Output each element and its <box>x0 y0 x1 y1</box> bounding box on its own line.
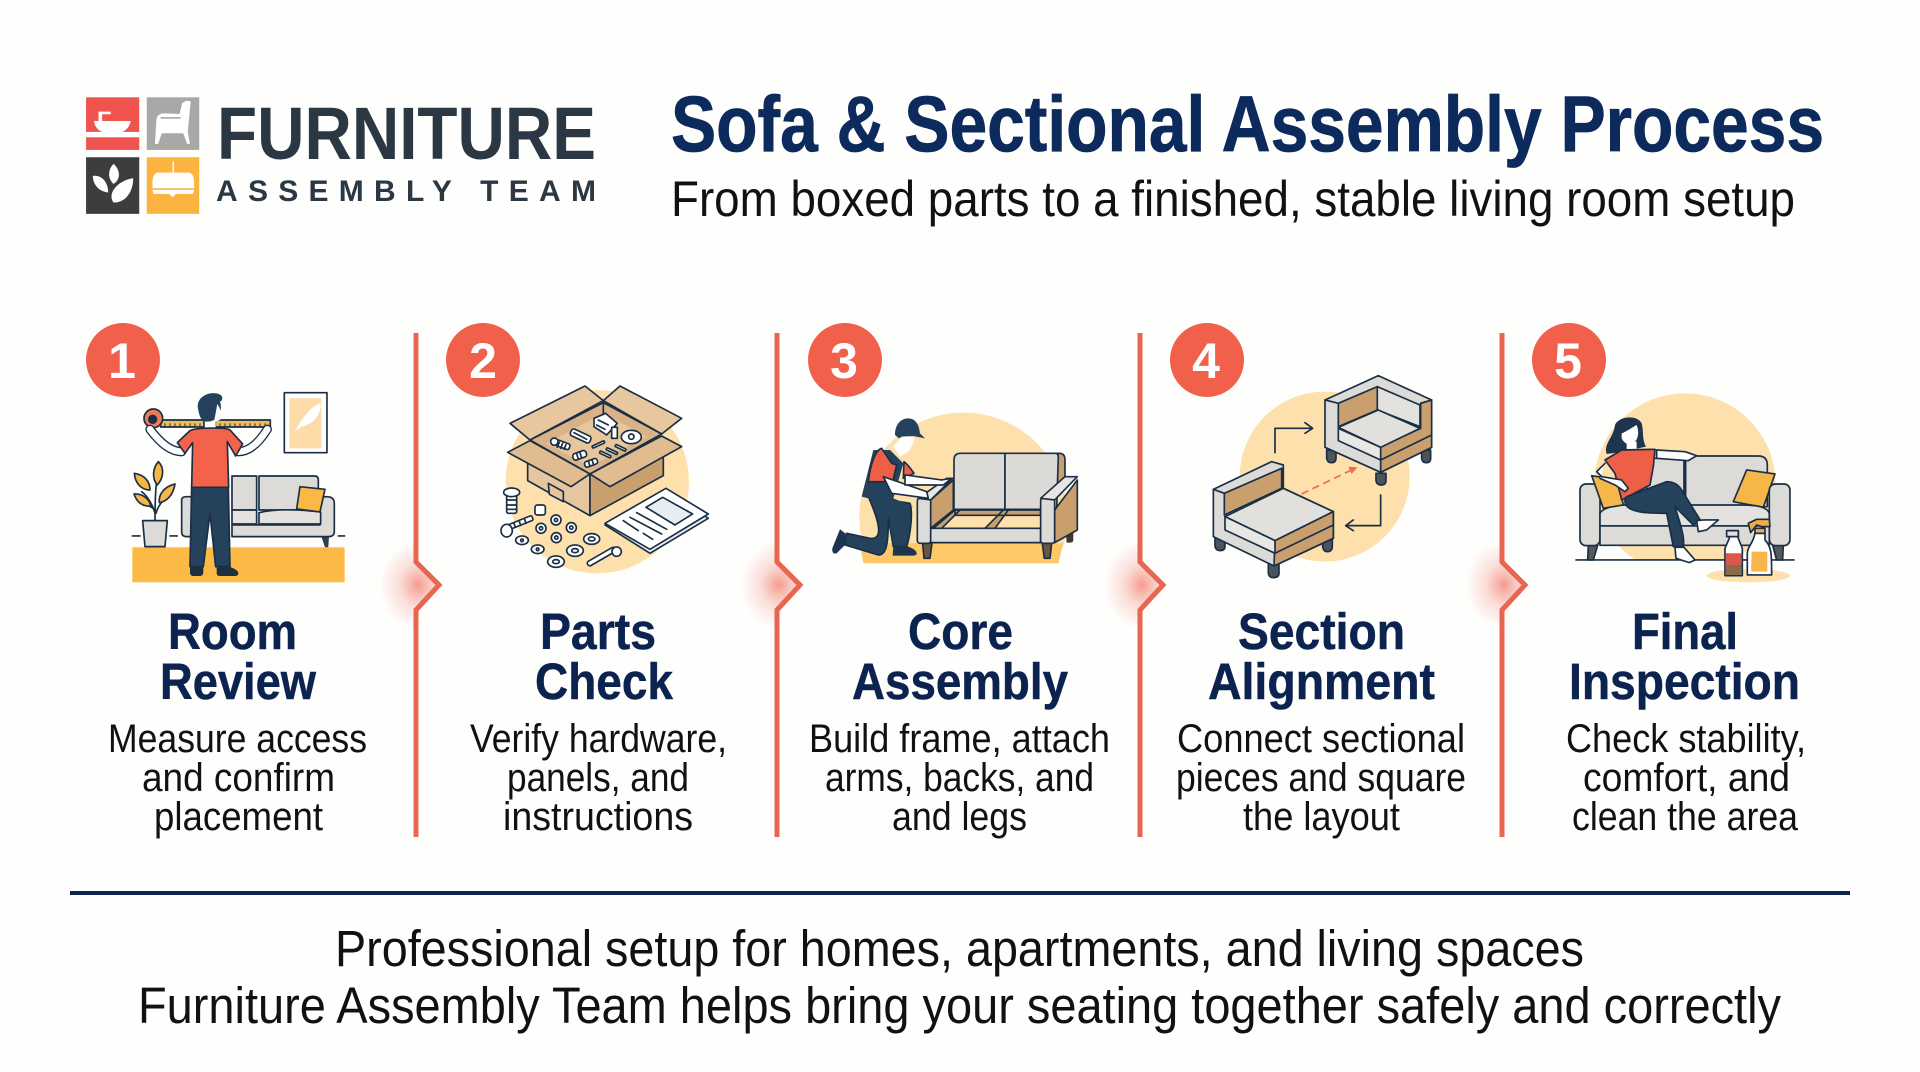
description: and confirm <box>142 756 335 800</box>
description: pieces and square <box>1176 756 1466 800</box>
heading: Final <box>1632 603 1738 660</box>
description: panels, and <box>507 756 689 800</box>
lower chair <box>1213 462 1333 578</box>
heading <box>1569 603 1800 710</box>
icon: person relaxing on finished sofa <box>1576 393 1794 582</box>
icon: worker assembling sofa <box>832 412 1078 564</box>
description: Verify hardware, <box>470 717 727 761</box>
panel: step 5 final inspection <box>1532 323 1806 839</box>
number badge 4: 4 <box>1192 333 1220 389</box>
upper chair <box>1325 376 1432 485</box>
description: the layout <box>1243 795 1400 839</box>
heading: Core <box>908 603 1013 660</box>
number badge 1: 1 <box>108 333 136 389</box>
panel: step 3 core assembly <box>808 323 1110 839</box>
heading: Inspection <box>1569 653 1800 710</box>
number badge 1 <box>86 323 160 397</box>
description: Connect sectional <box>1177 717 1465 761</box>
number badge 2 <box>446 323 520 397</box>
heading <box>160 603 316 710</box>
description <box>1566 717 1806 839</box>
panel: step 2 parts check <box>446 323 727 839</box>
logo icon tiles <box>86 97 199 214</box>
number badge 5 <box>1532 323 1606 397</box>
icon: open box with hardware and manual <box>501 386 708 573</box>
heading: Review <box>160 653 316 710</box>
footer text <box>138 920 1781 1034</box>
icon: person measuring room <box>132 393 345 582</box>
footer text: Professional setup for homes, apartments, and living spaces <box>335 920 1584 977</box>
logo tagline: ASSEMBLY TEAM <box>216 175 596 208</box>
description: and legs <box>892 795 1027 839</box>
description <box>108 717 367 839</box>
panel: step 1 room review <box>86 323 367 839</box>
description <box>470 717 727 839</box>
description: Build frame, attach <box>809 717 1110 761</box>
description: clean the area <box>1572 795 1799 839</box>
subtitle: From boxed parts to a finished, stable living room setup <box>671 171 1795 227</box>
logo wordmark: FURNITURE <box>217 92 596 175</box>
logo: Furniture Assembly Team <box>86 92 596 214</box>
number badge 3: 3 <box>830 333 858 389</box>
description <box>809 717 1110 839</box>
heading: Assembly <box>852 653 1069 710</box>
description: Measure access <box>108 717 367 761</box>
number badge 3 <box>808 323 882 397</box>
description: Check stability, <box>1566 717 1806 761</box>
description: instructions <box>503 795 693 839</box>
description: arms, backs, and <box>825 756 1094 800</box>
heading: Room <box>168 603 297 660</box>
panel: step 4 section alignment <box>1170 323 1466 839</box>
heading <box>852 603 1069 710</box>
arrow divider 2 <box>741 333 817 837</box>
heading: Section <box>1238 603 1405 660</box>
heading: Check <box>535 653 674 710</box>
footer text: Furniture Assembly Team helps bring your seating together safely and correctly <box>138 977 1781 1034</box>
heading: Parts <box>540 603 656 660</box>
heading <box>1208 603 1435 710</box>
arrow divider 3 <box>1104 333 1180 837</box>
arrow divider 4 <box>1466 333 1542 837</box>
number badge 4 <box>1170 323 1244 397</box>
heading: Alignment <box>1208 653 1435 710</box>
heading <box>535 603 674 710</box>
number badge 2: 2 <box>469 333 497 389</box>
description: comfort, and <box>1583 756 1790 800</box>
description <box>1176 717 1466 839</box>
number badge 5: 5 <box>1554 333 1582 389</box>
description: placement <box>154 795 323 839</box>
icon: sectional pieces aligning <box>1213 376 1432 578</box>
arrow divider 1 <box>380 333 456 837</box>
